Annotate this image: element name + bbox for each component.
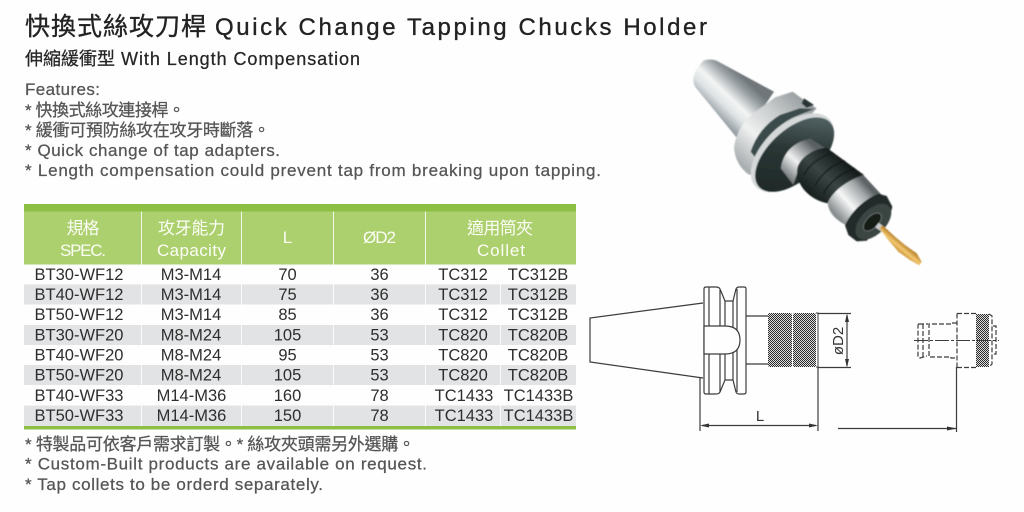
table row: 70 [278, 266, 297, 284]
features text block [25, 80, 601, 180]
table row: TC1433B [504, 387, 573, 405]
subtitle: With Length Compensation [121, 49, 360, 69]
dimension D2: øD2 [830, 327, 847, 355]
table row: BT50-WF20 [35, 366, 123, 384]
table row [24, 406, 576, 426]
table row: TC1433B [504, 407, 573, 425]
table row [24, 284, 576, 304]
steel sleeve [828, 175, 883, 225]
black spring body [797, 148, 864, 203]
table row: TC820B [508, 326, 568, 344]
nose collar [860, 210, 885, 234]
disc silver rim [736, 98, 848, 207]
table row: 36 [370, 306, 389, 324]
table row: M3-M14 [161, 266, 221, 284]
table row: BT30-WF12 [35, 266, 123, 284]
footnotes: * Custom-Built products are available on request. [25, 454, 427, 474]
drive key slot [704, 326, 740, 354]
table row: TC820B [508, 366, 568, 384]
table row: 36 [370, 286, 389, 304]
table row: BT40-WF33 [35, 387, 123, 405]
centre line [914, 340, 999, 342]
table row: 53 [370, 366, 389, 384]
table row [24, 325, 576, 345]
table row [35, 387, 573, 405]
table row: TC1433 [435, 387, 493, 405]
table row: 53 [370, 346, 389, 364]
table row: 160 [274, 387, 301, 405]
product photo: tapping chuck holder [693, 59, 922, 265]
table row: M3-M14 [161, 286, 221, 304]
table row: 78 [370, 387, 389, 405]
table row [35, 346, 568, 364]
table header: 規格 [66, 219, 100, 238]
title: Quick Change Tapping Chucks Holder [215, 14, 707, 41]
table row [35, 306, 568, 324]
table row: M14-M36 [157, 387, 226, 405]
table header: L [283, 228, 292, 247]
table row: 105 [274, 326, 301, 344]
table row: M3-M14 [161, 306, 221, 324]
table row: TC312 [438, 306, 488, 324]
table row: BT40-WF20 [35, 346, 123, 364]
dimension L [700, 367, 818, 431]
table top bar [24, 204, 576, 212]
table row: TC820 [438, 366, 488, 384]
technical drawing: holder side view [590, 287, 957, 432]
table row: 95 [278, 346, 297, 364]
table row: 150 [274, 407, 301, 425]
table row: TC312 [438, 266, 488, 284]
table header [24, 212, 576, 264]
dimension line to collet [838, 367, 957, 432]
table row: 36 [370, 266, 389, 284]
flange detail lines [709, 287, 737, 394]
flange [734, 92, 817, 175]
table row: BT30-WF20 [35, 326, 123, 344]
steel neck [781, 138, 828, 185]
dimension L: L [756, 408, 764, 425]
table row: TC312B [508, 306, 568, 324]
taper outline [590, 303, 703, 378]
table row: TC820 [438, 346, 488, 364]
collet knurl [976, 314, 989, 367]
collar [746, 316, 768, 364]
dark disc [742, 104, 847, 206]
table row: M8-M24 [161, 326, 221, 344]
drill bit [879, 225, 922, 265]
table header: ØD2 [363, 228, 396, 247]
flange groove [751, 108, 814, 157]
title [25, 13, 707, 41]
table row: TC312 [438, 286, 488, 304]
table row: 85 [278, 306, 297, 324]
table header: SPEC. [60, 241, 106, 260]
table row: BT50-WF12 [35, 306, 123, 324]
table header: 攻牙能力 [158, 219, 225, 238]
table row [24, 365, 576, 385]
table row: BT50-WF33 [35, 407, 123, 425]
dimension D2 [818, 314, 851, 368]
table row: TC820 [438, 326, 488, 344]
title: 快換式絲攻刀桿 [25, 13, 206, 41]
flange outline [704, 287, 746, 394]
table row: BT40-WF12 [35, 286, 123, 304]
features text block: Features: [25, 80, 100, 99]
table bottom bar [24, 426, 576, 430]
drive key [802, 98, 814, 108]
collet outline [918, 314, 976, 368]
table row: 75 [278, 286, 297, 304]
subtitle: 伸縮緩衝型 [25, 49, 115, 69]
table row [35, 266, 568, 284]
table header: Capacity [157, 241, 226, 260]
table row: M14-M36 [157, 407, 226, 425]
black nose [845, 194, 892, 241]
table row: TC312B [508, 286, 568, 304]
table row: TC1433 [435, 407, 493, 425]
footnotes: * Tap collets to be orderd separately. [25, 475, 323, 494]
table row: 105 [274, 366, 301, 384]
footnotes: * 特製品可依客戶需求訂製。* 絲攻夾頭需另外選購。 [25, 435, 415, 454]
table row: TC820B [508, 346, 568, 364]
collet nose [989, 314, 996, 367]
features text block: * Quick change of tap adapters. [25, 141, 280, 160]
features text block: * 緩衝可預防絲攻在攻牙時斷落。 [25, 121, 270, 140]
footnotes [25, 435, 427, 494]
taper cone [693, 59, 774, 142]
nose face [849, 197, 898, 246]
table row: 53 [370, 326, 389, 344]
table header: Collet [477, 241, 525, 260]
table row: TC312B [508, 266, 568, 284]
knurled nut [768, 313, 818, 367]
features text block: * 快換式絲攻連接桿。 [25, 101, 185, 120]
technical drawing: collet dashed view [914, 314, 999, 368]
table header: 適用筒夾 [467, 219, 533, 238]
features text block: * Length compensation could prevent tap from breaking upon tapping. [25, 161, 601, 180]
specification table [24, 204, 576, 430]
table row: 78 [370, 407, 389, 425]
table row: M8-M24 [161, 366, 221, 384]
table row: M8-M24 [161, 346, 221, 364]
body ring lines [804, 153, 855, 194]
drill shank [875, 223, 885, 232]
